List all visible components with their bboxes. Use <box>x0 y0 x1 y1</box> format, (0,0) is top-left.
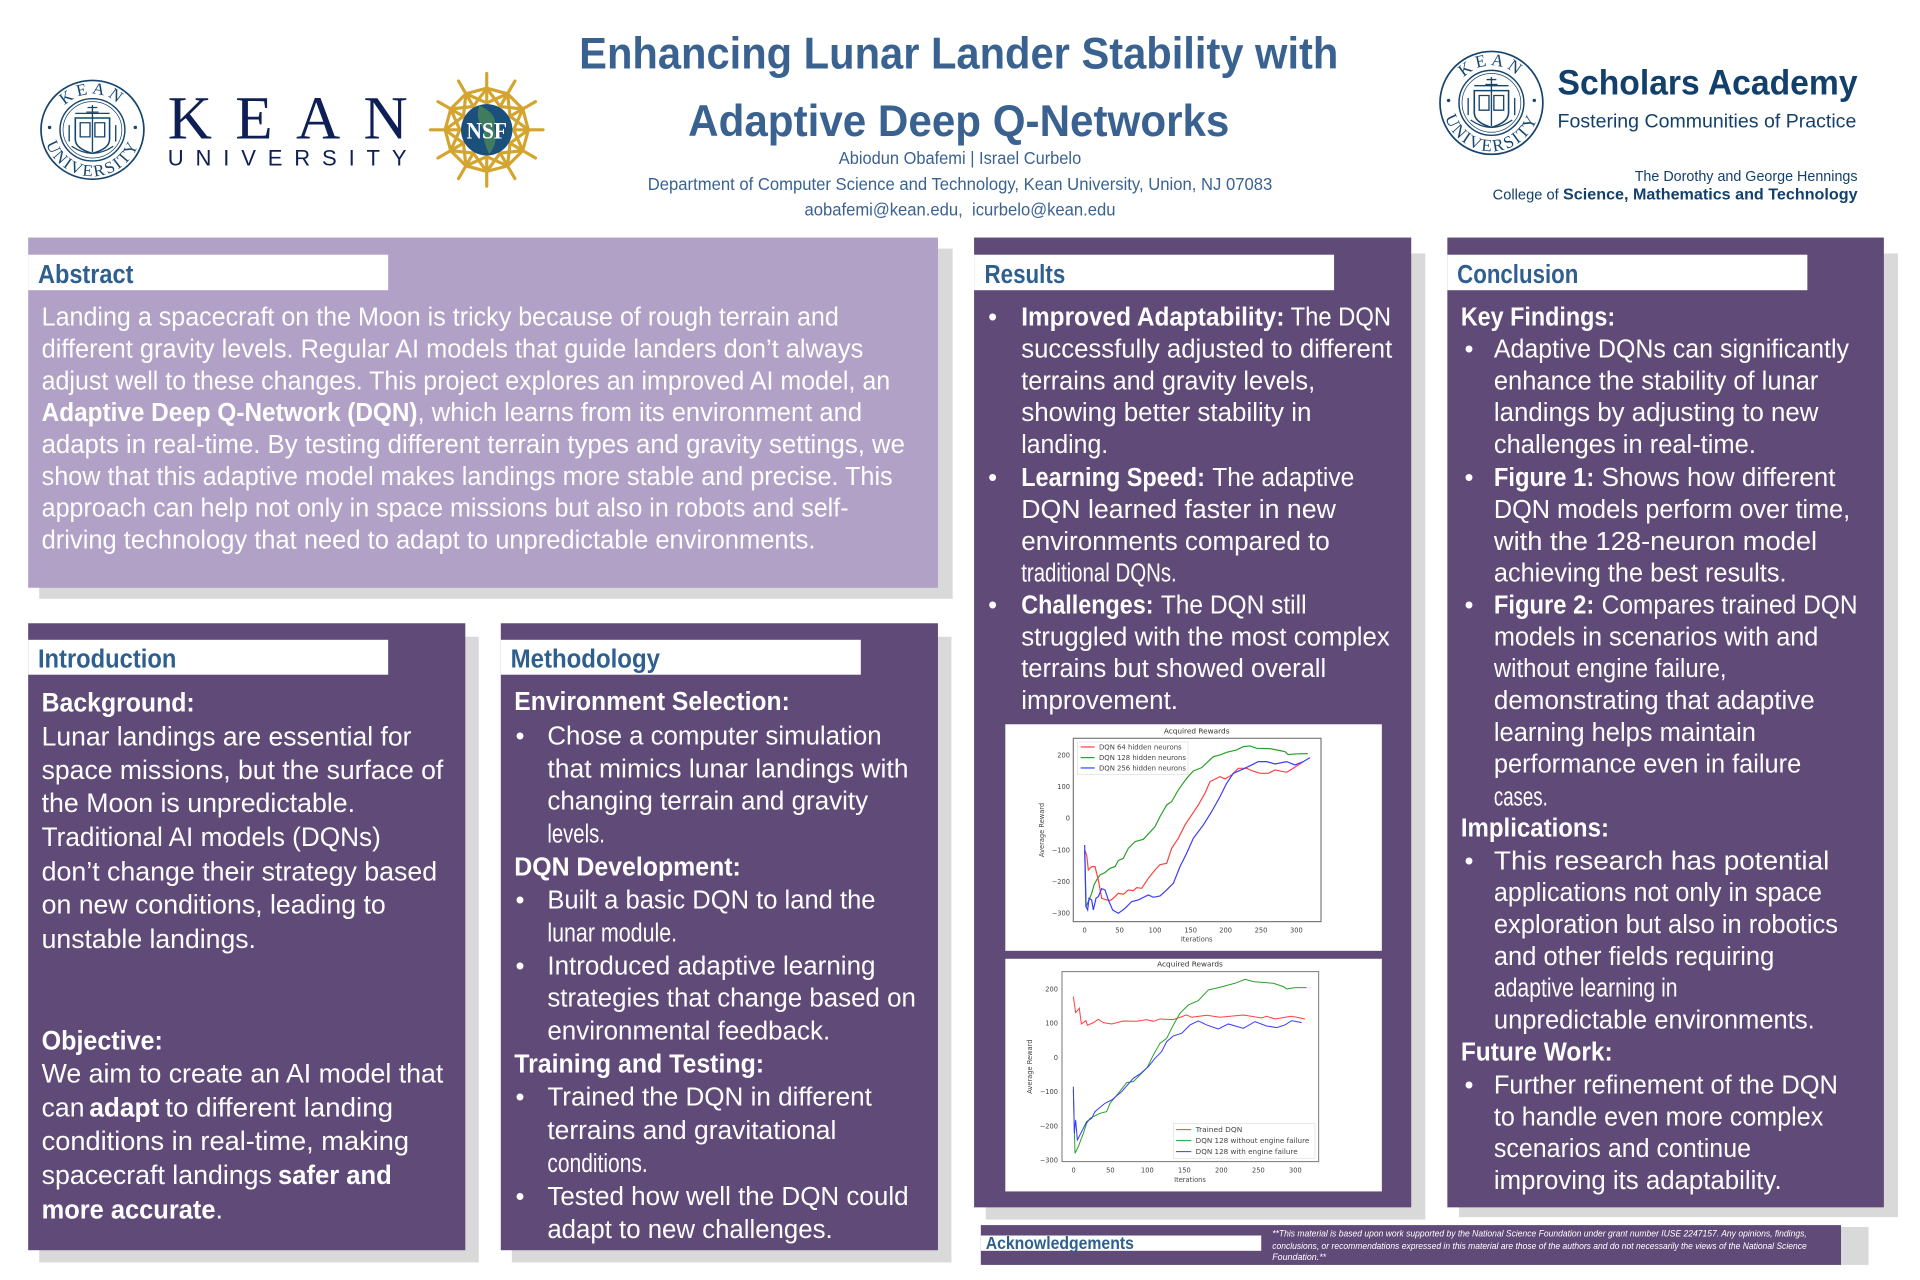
text block: methodology steps: adapt to new challenges. <box>547 1216 833 1244</box>
text block: implications: and other fields requiring <box>1494 943 1774 971</box>
text block: implications: This research has potential <box>1494 847 1829 875</box>
chart: rewards with and without engine failure: 0 <box>1072 1167 1076 1175</box>
chart: rewards with and without engine failure: 0 <box>1054 1054 1058 1062</box>
authors and affiliation: Abiodun Obafemi | Israel Curbelo <box>839 148 1081 168</box>
text block: future work: Future Work: <box>1461 1038 1613 1066</box>
text block: results bullets: environments compared to <box>1021 528 1330 556</box>
text block: objective: safer and <box>278 1160 392 1190</box>
text block: background: Traditional AI models (DQNs) <box>42 822 381 852</box>
icon: Kean seal <box>40 80 145 180</box>
chart: rewards by hidden neurons: −300 <box>1052 910 1070 918</box>
text block: abstract body: , which learns from its environment and <box>418 399 862 427</box>
title: Enhancing Lunar Lander Stability with <box>579 30 1338 79</box>
header: Kean University logo <box>40 80 408 180</box>
text block: methodology steps: changing terrain and gravity <box>547 787 868 815</box>
text block: methodology steps: • <box>516 1183 525 1211</box>
wordmark: UNIVERSITY: UNIVERSITY <box>168 145 407 170</box>
text block: methodology steps: conditions. <box>547 1150 648 1178</box>
text block: key findings: performance even in failure <box>1494 751 1801 779</box>
icon: Kean seal: KEAN <box>58 83 124 105</box>
text block: methodology steps: levels. <box>547 820 605 848</box>
text block: background: on new conditions, leading to <box>42 889 386 919</box>
text block: background: don’t change their strategy based <box>42 856 437 886</box>
chart: rewards with and without engine failure: 100 <box>1141 1167 1154 1175</box>
text block: key findings: Compares trained DQN <box>1602 591 1858 619</box>
chart: rewards by hidden neurons: 250 <box>1255 926 1267 934</box>
text block: results bullets: traditional DQNs. <box>1021 560 1177 588</box>
text block: results bullets: DQN learned faster in new <box>1021 496 1336 524</box>
wordmark: KEAN: KEAN <box>168 84 408 152</box>
text block: objective: spacecraft landings <box>42 1160 272 1190</box>
text block: abstract body: adapts in real-time. By testing different terrain types and gravity settings, we <box>42 431 905 459</box>
text block: results bullets: Improved Adaptability: <box>1021 304 1284 332</box>
icon: Kean seal right <box>1439 50 1544 156</box>
chart: rewards by hidden neurons: 300 <box>1290 926 1303 934</box>
text block: key findings: without engine failure, <box>1493 655 1727 683</box>
authors and affiliation: Department of Computer Science and Technology, Kean University, Union, NJ 07083 <box>648 174 1272 194</box>
text block: objective: Objective: <box>42 1025 163 1055</box>
text block: methodology steps: Built a basic DQN to land the <box>547 887 876 915</box>
chart: rewards by hidden neurons: Acquired Rewards <box>1164 726 1230 735</box>
panel: Acknowledgements <box>981 1225 1869 1265</box>
chart: rewards by hidden neurons: 200 <box>1219 926 1232 934</box>
heading: Methodology: Methodology <box>511 645 661 673</box>
heading: Introduction: Introduction <box>38 645 176 673</box>
text block: methodology steps: Tested how well the DQN could <box>547 1183 909 1211</box>
text block: key findings: Figure 1: <box>1494 464 1594 492</box>
text block: background: unstable landings. <box>42 924 256 954</box>
text block: key findings: learning helps maintain <box>1494 719 1756 747</box>
text block: results bullets: struggled with the most complex <box>1021 623 1390 651</box>
text block: key findings: demonstrating that adaptive <box>1494 687 1815 715</box>
text block: methodology steps <box>514 688 916 1244</box>
text block: abstract body: approach can help not only in space missions but also in robots and self- <box>42 495 849 523</box>
text block: implications: exploration but also in robotics <box>1494 911 1838 939</box>
text block: implications: adaptive learning in <box>1494 975 1678 1003</box>
text block: methodology steps: terrains and gravitational <box>547 1117 836 1145</box>
authors and affiliation: aobafemi@kean.edu, icurbelo@kean.edu <box>804 200 1116 220</box>
chart: rewards by hidden neurons: DQN 256 hidden neurons <box>1099 764 1187 772</box>
authors and affiliation <box>648 148 1272 220</box>
text block: methodology steps: Introduced adaptive learning <box>547 953 876 981</box>
chart: rewards with and without engine failure: 50 <box>1106 1167 1115 1175</box>
chart: rewards by hidden neurons: Average Reward <box>1038 803 1046 857</box>
text block: results bullets: • <box>988 464 997 492</box>
chart: rewards by hidden neurons: 150 <box>1184 926 1197 934</box>
college name: College of <box>1493 188 1560 204</box>
text block: background: the Moon is unpredictable. <box>42 788 355 818</box>
chart: rewards with and without engine failure: 250 <box>1252 1167 1265 1175</box>
text block: background: space missions, but the surface of <box>42 755 444 785</box>
icon: Kean seal right: UNIVERSITY <box>1446 112 1536 152</box>
text block: methodology steps: that mimics lunar landings with <box>547 756 909 784</box>
chart: rewards by hidden neurons: Iterations <box>1181 935 1213 943</box>
text block: key findings: • <box>1464 591 1473 619</box>
text block: results bullets: Learning Speed: <box>1021 464 1205 492</box>
panel: Results <box>974 238 1425 1220</box>
text block: results bullets: terrains and gravity levels, <box>1021 367 1315 395</box>
text block: implications <box>1461 814 1838 1035</box>
text block: future work <box>1461 1038 1838 1195</box>
text block: key findings: challenges in real-time. <box>1494 431 1756 459</box>
panel: Methodology <box>501 623 951 1262</box>
text block: results bullets: The DQN still <box>1161 591 1307 619</box>
text block: key findings: landings by adjusting to new <box>1494 399 1819 427</box>
chart: rewards by hidden neurons: 0 <box>1066 815 1070 823</box>
heading: Abstract: Abstract <box>38 261 134 289</box>
text block: results bullets: Challenges: <box>1021 591 1153 619</box>
text block: results bullets: • <box>988 304 997 332</box>
chart: rewards with and without engine failure: 300 <box>1289 1167 1302 1175</box>
text block: results bullets: landing. <box>1021 431 1108 459</box>
text block: methodology steps: environmental feedback. <box>547 1018 830 1046</box>
text block: methodology steps: • <box>516 887 525 915</box>
title <box>579 30 1338 146</box>
chart: rewards with and without engine failure: Average Reward <box>1026 1040 1034 1094</box>
text block: methodology steps: Chose a computer simulation <box>547 722 882 750</box>
text block: future work: to handle even more complex <box>1494 1103 1823 1131</box>
text block: results bullets: showing better stability in <box>1021 399 1311 427</box>
text block: objective: We aim to create an AI model that <box>42 1058 444 1088</box>
text block: key findings: DQN models perform over time, <box>1494 496 1850 524</box>
college name <box>1493 169 1858 204</box>
text block: implications: • <box>1464 847 1473 875</box>
text block: results bullets: successfully adjusted to different <box>1021 336 1392 364</box>
text block: key findings: Figure 2: <box>1494 591 1594 619</box>
chart: rewards by hidden neurons: 200 <box>1057 751 1070 759</box>
text block: results bullets: • <box>988 591 997 619</box>
text block: funding statement: Foundation.** <box>1272 1252 1326 1262</box>
text block: key findings: Key Findings: <box>1461 304 1615 332</box>
text block: funding statement: **This material is based upon work supported by the National Science Foundation under grant number IUSE 2247157. Any opinions, findings, <box>1272 1229 1807 1239</box>
text block: key findings: models in scenarios with and <box>1494 623 1818 651</box>
text block: key findings: Adaptive DQNs can significantly <box>1494 336 1849 364</box>
text block: abstract body: Landing a spacecraft on the Moon is tricky because of rough terrain and <box>42 304 839 332</box>
text block: key findings: • <box>1464 336 1473 364</box>
chart: rewards with and without engine failure: 200 <box>1215 1167 1228 1175</box>
text block: key findings <box>1461 304 1858 812</box>
text block: results bullets: The DQN <box>1291 304 1391 332</box>
college name: The Dorothy and George Hennings <box>1635 169 1858 185</box>
text block: methodology steps: • <box>516 1084 525 1112</box>
text block: funding statement: conclusions, or recommendations expressed in this material are those of the authors and do not necessarily the views of the National Science <box>1272 1241 1807 1251</box>
chart: rewards with and without engine failure: Trained DQN <box>1195 1126 1242 1134</box>
chart: rewards with and without engine failure: 100 <box>1045 1020 1058 1028</box>
tagline: Fostering Communities of Practice <box>1558 110 1856 132</box>
chart: rewards by hidden neurons: 100 <box>1057 783 1070 791</box>
text block: methodology steps: Environment Selection: <box>514 688 790 716</box>
chart: rewards by hidden neurons: 100 <box>1149 926 1161 934</box>
text block: results bullets: improvement. <box>1021 687 1178 715</box>
text block: abstract body: driving technology that need to adapt to unpredictable environments. <box>42 527 816 555</box>
chart: rewards with and without engine failure: DQN 128 without engine failure <box>1196 1137 1309 1145</box>
text block: abstract body: different gravity levels. Regular AI models that guide landers don’t always <box>42 336 863 364</box>
text block: results bullets <box>988 304 1392 715</box>
icon: Kean seal right: KEAN <box>1457 54 1523 77</box>
text block: key findings: cases. <box>1494 784 1548 812</box>
icon: NSF logo: NSF <box>467 118 507 144</box>
text block: key findings: Shows how different <box>1602 464 1836 492</box>
text block: key findings: achieving the best results. <box>1494 560 1787 588</box>
chart: rewards by hidden neurons: DQN 128 hidden neurons <box>1099 754 1187 762</box>
panel: Conclusion <box>1447 238 1898 1217</box>
text block: implications: applications not only in space <box>1494 879 1822 907</box>
chart: rewards with and without engine failure: 150 <box>1178 1167 1191 1175</box>
text block: implications: unpredictable environments. <box>1494 1007 1815 1035</box>
heading: Acknowledgements: Acknowledgements <box>986 1233 1134 1253</box>
text block: objective: more accurate <box>42 1194 216 1224</box>
text block: methodology steps: Trained the DQN in different <box>547 1084 872 1112</box>
text block: objective: adapt <box>89 1093 159 1123</box>
chart: rewards with and without engine failure: DQN 128 with engine failure <box>1196 1148 1298 1156</box>
text block: objective: . <box>216 1194 223 1224</box>
panel: Abstract <box>28 238 953 599</box>
chart: rewards with and without engine failure: −200 <box>1040 1122 1058 1130</box>
text block: abstract body <box>42 304 905 555</box>
text block: future work: scenarios and continue <box>1494 1135 1751 1163</box>
chart: rewards by hidden neurons: DQN 64 hidden neurons <box>1099 743 1182 751</box>
text block: key findings: with the 128-neuron model <box>1493 528 1817 556</box>
text block: objective <box>42 1025 444 1224</box>
heading: Results: Results <box>984 261 1065 289</box>
heading: Conclusion: Conclusion <box>1457 261 1578 289</box>
text block: key findings: • <box>1464 464 1473 492</box>
text block: results bullets: The adaptive <box>1212 464 1354 492</box>
text block: objective: to different landing <box>165 1093 393 1123</box>
text block: funding statement <box>1272 1229 1807 1262</box>
chart: rewards by hidden neurons: −200 <box>1052 878 1070 886</box>
chart: rewards with and without engine failure: Iterations <box>1174 1176 1206 1184</box>
text block: future work: improving its adaptability. <box>1494 1167 1782 1195</box>
wordmark: Scholars Academy: Scholars Academy <box>1558 62 1858 102</box>
text block: methodology steps: • <box>516 953 525 981</box>
chart: rewards with and without engine failure: Acquired Rewards <box>1157 959 1223 968</box>
chart: rewards with and without engine failure: 200 <box>1045 986 1058 994</box>
chart: rewards by hidden neurons: 50 <box>1115 926 1124 934</box>
panel: Introduction <box>28 623 479 1262</box>
chart: rewards by hidden neurons <box>1005 724 1382 951</box>
header: Scholars Academy logo <box>1439 50 1858 204</box>
text block: background: Background: <box>42 687 195 717</box>
text block: abstract body: adjust well to these changes. This project explores an improved AI model, an <box>42 367 890 395</box>
chart: rewards with and without engine failure: −300 <box>1040 1156 1058 1164</box>
text block: future work: Further refinement of the DQN <box>1494 1071 1838 1099</box>
text block: objective: conditions in real-time, making <box>42 1126 409 1156</box>
chart: rewards with and without engine failure: −100 <box>1040 1088 1058 1096</box>
text block: methodology steps: • <box>516 722 525 750</box>
text block: background: Lunar landings are essential for <box>42 722 411 752</box>
icon: NSF logo <box>428 71 546 189</box>
chart: rewards with and without engine failure <box>1005 959 1382 1191</box>
text block: methodology steps: lunar module. <box>547 920 677 948</box>
text block: methodology steps: Training and Testing: <box>514 1051 764 1079</box>
text block: implications: Implications: <box>1461 814 1609 842</box>
chart: rewards by hidden neurons: 0 <box>1083 926 1087 934</box>
chart: rewards by hidden neurons: −100 <box>1052 846 1070 854</box>
text block: abstract body: Adaptive Deep Q-Network (DQN) <box>42 399 418 427</box>
text block: methodology steps: DQN Development: <box>514 854 741 882</box>
text block: key findings: enhance the stability of lunar <box>1494 367 1819 395</box>
text block: methodology steps: strategies that change based on <box>547 985 916 1013</box>
text block: background <box>42 687 444 954</box>
title: Adaptive Deep Q-Networks <box>688 97 1229 146</box>
text block: abstract body: show that this adaptive model makes landings more stable and precise. This <box>42 463 893 491</box>
text block: results bullets: terrains but showed overall <box>1021 655 1326 683</box>
college name: Science, Mathematics and Technology <box>1563 187 1858 204</box>
text block: objective: can <box>42 1093 84 1123</box>
text block: future work: • <box>1464 1071 1473 1099</box>
icon: Kean seal: UNIVERSITY <box>48 140 137 176</box>
